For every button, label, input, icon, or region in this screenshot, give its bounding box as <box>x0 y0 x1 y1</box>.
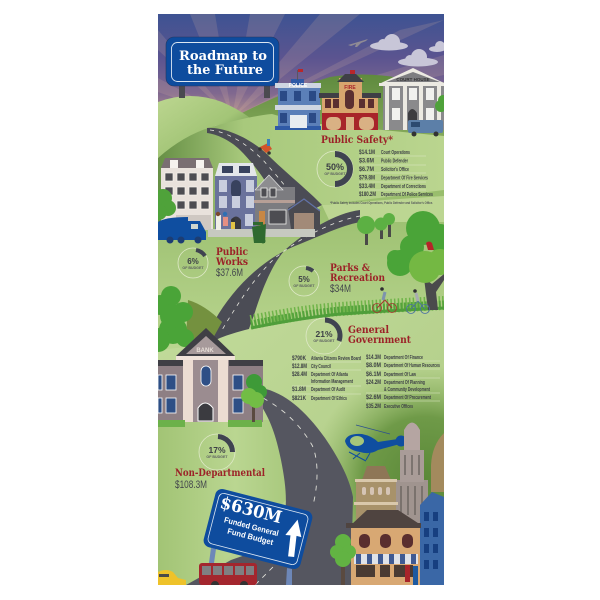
heading: general government: General <box>348 325 389 336</box>
table: public safety: $79.8M <box>359 176 375 182</box>
background sky <box>158 14 444 113</box>
icon: tree left of bank <box>146 286 194 352</box>
heading: non-departmental: Non-Departmental <box>175 468 265 479</box>
table: general government right: $2.6M <box>366 395 381 401</box>
building: shop <box>346 510 421 585</box>
table: general government left: $28.4M <box>292 372 307 378</box>
heading: non-departmental: $108.3M <box>175 479 207 491</box>
table: public safety: Public Defender <box>381 158 409 164</box>
table: public safety: $3.6M <box>359 158 374 164</box>
table: general government right: $6.1M <box>366 372 381 378</box>
sun rays <box>158 14 444 118</box>
icon: red bus <box>199 563 257 589</box>
donut: public works <box>178 248 208 278</box>
road: lower section <box>186 388 353 585</box>
donut: non-departmental <box>199 434 235 470</box>
donut: parks: OF BUDGET <box>293 284 315 288</box>
building: blue skyscraper <box>420 492 444 585</box>
icon: up arrow <box>280 518 305 558</box>
building: police station: POLICE <box>289 83 308 89</box>
table: general government right: Department Of Law <box>384 372 416 378</box>
icon: police van <box>408 120 443 136</box>
budget amount: $630M <box>218 493 284 528</box>
left lawn <box>158 420 287 585</box>
table: public safety: Court Operations <box>381 150 410 156</box>
table: general government right: Executive Offices <box>384 404 413 410</box>
building: right tan tower <box>431 433 444 492</box>
donut: parks <box>289 266 319 296</box>
building: court house <box>379 68 446 130</box>
donut: general government: 21% <box>315 329 333 339</box>
heading: general government <box>348 325 411 346</box>
table: general government left: $821K <box>292 396 307 402</box>
table: general government left: Department Of Atlanta <box>311 372 349 378</box>
icon: tree near houses <box>158 189 176 220</box>
heading: parks and recreation: Parks & <box>330 263 370 274</box>
table: public safety: Department Of Fire Services <box>381 176 428 182</box>
table: general government left: $12.8M <box>292 364 307 370</box>
table: public safety: $6.7M <box>359 167 374 173</box>
lower foreground ground <box>158 307 444 585</box>
title text: Roadmap to <box>179 49 267 64</box>
heading: public safety: Public Safety* <box>321 135 394 146</box>
heading: general government: Government <box>348 335 411 346</box>
table: general government right: Department Of Human Resources <box>384 363 440 369</box>
building: bank <box>158 328 263 427</box>
table: public safety: $33.4M <box>359 184 375 190</box>
table: general government right: $8.0M <box>366 363 381 369</box>
building: tan building <box>354 466 398 525</box>
table: general government left: $790K <box>292 356 307 362</box>
budget label <box>221 515 280 548</box>
building: white townhouse <box>161 158 213 230</box>
building: bank: BANK <box>196 348 214 354</box>
grass strip <box>251 303 444 328</box>
table: general government left: City Council <box>311 364 331 370</box>
donut: public safety: OF BUDGET <box>324 172 346 176</box>
donut: public works: OF BUDGET <box>182 266 204 270</box>
sidewalk <box>208 229 315 237</box>
building: grey house <box>254 175 295 229</box>
budget label: Fund Budget <box>226 527 274 547</box>
budget label: Funded General <box>223 515 280 538</box>
olive shade behind trees <box>186 300 222 340</box>
building: fire station <box>319 70 381 130</box>
icon: tree by court house <box>435 95 444 112</box>
road: upper section <box>207 128 322 208</box>
table: general government right: $14.3M <box>366 355 381 361</box>
main hill <box>158 114 444 229</box>
icon: airplane <box>348 39 368 47</box>
heading: non-departmental <box>175 468 265 491</box>
table: general government left: Information Management <box>311 379 353 385</box>
left hill <box>158 96 250 158</box>
title second line: the Future <box>187 63 263 78</box>
table: general government right: Department Of Procurement <box>384 395 431 401</box>
heading: public works <box>215 247 248 279</box>
building: blue townhouse <box>215 163 257 230</box>
footnote: *Public Safety includes Court Operations, Public Defender and Solicitor's Office. <box>330 200 433 205</box>
donut: non-departmental: OF BUDGET <box>206 455 228 459</box>
heading: public works: $37.6M <box>216 267 243 279</box>
table: general government left: Department Of Ethics <box>311 396 347 402</box>
heading: public works: Public <box>216 247 248 258</box>
donut: general government: OF BUDGET <box>313 339 335 343</box>
table: general government right: $35.2M <box>366 404 381 410</box>
building: police station <box>275 69 321 130</box>
budget sign <box>202 487 314 571</box>
middle ground <box>158 190 444 360</box>
icon: helicopter <box>345 425 406 461</box>
right dark hill <box>327 374 444 523</box>
building: court house: COURT HOUSE <box>396 77 430 82</box>
table: public safety: $180.2M <box>359 192 376 198</box>
table: general government left: Atlanta Citizens Review Board <box>311 356 361 362</box>
icon: yellow taxi <box>158 570 186 585</box>
clouds <box>370 34 445 66</box>
heading: parks and recreation: Recreation <box>330 273 386 284</box>
icon: tree by shop <box>330 534 356 585</box>
table: public safety <box>359 150 433 198</box>
icon: wheelie bin <box>252 222 266 244</box>
donut: public safety <box>317 151 353 187</box>
table: general government left: $1.8M <box>292 387 306 393</box>
heading: parks and recreation <box>330 263 386 295</box>
building: fire station: FIRE <box>344 85 356 91</box>
table: general government right: Department Of Finance <box>384 355 423 361</box>
table: public safety: Solicitor's Office <box>381 167 409 173</box>
table: public safety: Department Of Police Services <box>381 192 433 198</box>
title sign <box>166 37 279 98</box>
table: public safety: Department of Corrections <box>381 184 426 190</box>
heading: parks and recreation: $34M <box>330 283 351 295</box>
table: general government right: & Community Development <box>384 387 430 393</box>
heading: public works: Works <box>215 257 248 268</box>
background hill <box>218 74 444 136</box>
icon: family <box>216 212 235 230</box>
icon: small trees <box>357 213 395 245</box>
table: general government left: Department Of Audit <box>311 387 345 393</box>
icon: motorcycle rider <box>258 139 272 155</box>
donut: non-departmental: 17% <box>208 445 226 455</box>
icon: tree by bank <box>241 374 267 422</box>
table: general government right: $24.2M <box>366 380 381 386</box>
icon: large tree with cardinal <box>387 211 444 310</box>
table: public safety: $14.1M <box>359 150 375 156</box>
donut: public safety: 50% <box>326 162 344 172</box>
table: general government right: Department Of Planning <box>384 380 425 386</box>
donut: public works: 6% <box>187 257 199 266</box>
donut: parks: 5% <box>298 275 310 284</box>
icon: cyclists <box>372 287 430 314</box>
building: grey tower <box>395 422 428 524</box>
table: general government right <box>366 355 440 410</box>
table: general government left <box>292 356 361 402</box>
icon: garbage truck <box>158 217 206 244</box>
building: garage <box>288 199 320 229</box>
budget sign posts <box>208 548 292 585</box>
road: middle section <box>205 210 360 340</box>
donut: general government <box>306 318 342 354</box>
